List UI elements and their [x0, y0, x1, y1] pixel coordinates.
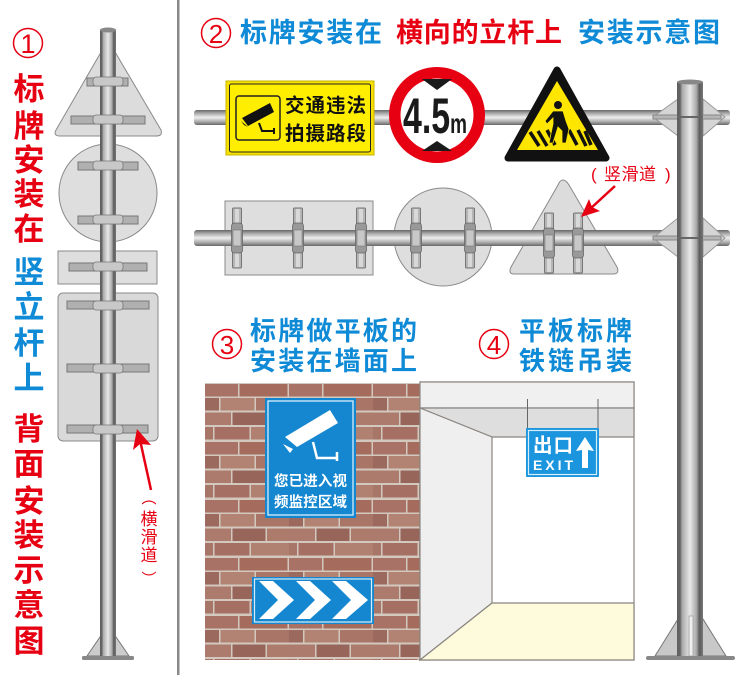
heading: section 4 title: 铁链吊装 — [519, 346, 632, 376]
heading: vertical title: 竖 — [14, 255, 44, 290]
sign: pedestrian crossing warning — [508, 70, 606, 158]
sign: height limit 4.5m: 4.5m — [403, 88, 467, 144]
sign: traffic violation camera: 拍摄路段 — [285, 122, 366, 145]
callout: horizontal slide: 道 — [140, 546, 158, 565]
heading: section 2 title: 横向的立杆上 — [396, 18, 562, 48]
heading: section 2 title — [202, 18, 720, 49]
sign: video surveillance area: 您已进入视 — [274, 472, 348, 490]
sign back: circle — [59, 144, 157, 242]
heading: vertical title: 上 — [14, 361, 44, 396]
heading: section 3 title: 标牌做平板的 — [250, 316, 417, 346]
arrow: to vertical slide — [581, 186, 615, 217]
sign: height limit 4.5m — [389, 67, 485, 163]
gusset plates and slots — [653, 99, 725, 257]
pole clamps — [93, 77, 123, 434]
sign: exit: EXIT — [533, 457, 573, 473]
sign back: small rectangle — [58, 251, 157, 284]
heading: section 2 title: 安装示意图 — [578, 18, 720, 48]
heading: section 3 title: 安装在墙面上 — [250, 346, 417, 376]
heading: vertical title: 标 — [14, 72, 44, 107]
mounting pole — [82, 28, 134, 660]
sign back: large rectangle — [58, 293, 158, 441]
vertical slide rails with clamps — [232, 208, 584, 273]
heading: circled number 1: 1 — [20, 29, 36, 59]
heading: section 3 title — [212, 316, 417, 376]
heading: vertical title: 安 — [14, 143, 44, 178]
heading: vertical title: 图 — [14, 624, 44, 659]
heading: vertical title: 示 — [14, 553, 44, 588]
heading: circled number 1 — [14, 28, 42, 59]
heading: vertical title: 牌 — [14, 109, 44, 144]
heading: section 2 title: 标牌安装在 — [240, 18, 382, 48]
callout: horizontal slide — [140, 490, 158, 588]
callout: vertical slide: ( — [591, 165, 597, 184]
callout: horizontal slide: ︵ — [141, 490, 157, 507]
callout: vertical slide: ) — [665, 165, 671, 184]
main upright pole — [646, 80, 735, 660]
heading: section 4 title — [480, 316, 632, 376]
hanging wires — [528, 399, 598, 428]
heading: section 4 title: 4 — [487, 330, 501, 360]
callout: horizontal slide: 滑 — [140, 528, 158, 547]
sign back: triangle — [55, 40, 161, 136]
heading: section 3 title: 3 — [220, 330, 234, 360]
heading: vertical title: 背 — [14, 412, 44, 447]
callout: vertical slide — [591, 165, 671, 184]
heading: vertical title: 装 — [14, 177, 44, 212]
callout: horizontal slide: ︶ — [141, 571, 157, 588]
heading: vertical title: 杆 — [14, 326, 44, 361]
heading: vertical title: 意 — [14, 588, 44, 623]
sign back: triangle — [510, 180, 618, 274]
heading: vertical title: 立 — [14, 290, 44, 325]
sign back: rectangle — [225, 201, 373, 275]
brick wall — [205, 383, 420, 660]
panel: hanging sign with chains — [420, 316, 634, 660]
arrow: to horizontal slide — [133, 429, 151, 490]
sign: direction chevrons — [252, 577, 374, 624]
panel: vertical pole rear mounting — [14, 28, 161, 660]
sign: exit: 出口 — [533, 435, 573, 457]
heading: vertical title: 在 — [14, 212, 44, 247]
sign: video surveillance area — [265, 398, 356, 518]
room interior — [420, 382, 634, 660]
sign back: circle — [394, 188, 492, 286]
panel: flat sign on wall — [205, 316, 420, 660]
heading: section 2 title: 2 — [209, 19, 223, 49]
sign: video surveillance area: 频监控区域 — [274, 493, 348, 511]
upper horizontal bar — [194, 110, 730, 125]
heading: vertical title: 面 — [14, 447, 44, 482]
sign: traffic violation camera — [226, 81, 374, 155]
sign: traffic violation camera: 交通违法 — [285, 94, 366, 117]
heading: vertical title — [14, 72, 44, 659]
heading: vertical title: 装 — [14, 518, 44, 553]
sign: exit — [526, 428, 599, 477]
horizontal slide rails — [67, 78, 149, 433]
heading: section 4 title: 平板标牌 — [519, 316, 632, 346]
panel: horizontal bar mounting — [194, 18, 735, 660]
heading: vertical title: 安 — [14, 484, 44, 519]
callout: vertical slide: 竖滑道 — [604, 165, 656, 184]
callout: horizontal slide: 横 — [140, 510, 158, 529]
lower horizontal bar — [194, 230, 730, 246]
